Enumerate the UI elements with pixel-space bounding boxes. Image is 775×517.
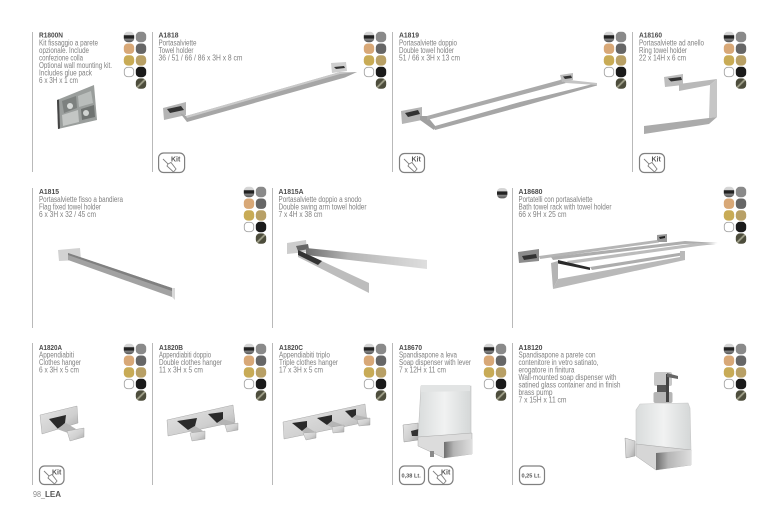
text block: A1820C description: Triple clothes hanger [279,358,338,367]
text block: A18670 description: Spandisapone a leva [399,350,457,360]
text block: A1819 description: Double towel holder [399,46,454,55]
text block: A1820A description: 6 x 3H x 5 cm [39,366,79,374]
text block: A1820C description [279,350,338,374]
text block: A1820B description: 11 x 3H x 5 cm [159,366,203,374]
badge: capacity [400,466,424,484]
product: towel holder [163,62,357,122]
text block: A18120 description: erogatore in finitura [518,366,575,374]
page number: 98_ [33,490,45,499]
text block: A1815 description: Flag fixed towel holder [39,202,101,211]
text block: A18160 description: Portasalviette ad anello [639,38,704,47]
text block: A1815A description: 7 x 4H x 38 cm [278,210,323,219]
colour swatches [724,187,746,244]
text block: A1818 description [158,38,243,62]
text block: A1819 description [399,38,460,62]
colour swatches [724,344,746,401]
colour swatches [364,32,386,89]
product: soap dispenser with pump [625,372,691,470]
panel: A1815A [272,187,507,328]
text block: A18670 description [399,350,471,374]
text block: R1800N description: Includes glue pack [39,68,93,77]
text block: A1815 description: Portasalviette fisso a bandiera [39,195,123,204]
panel: A1820A [32,343,146,485]
text block: A18680 description: 66 x 9H x 25 cm [518,210,567,219]
text block: A18160 description: 22 x 14H x 6 cm [639,53,686,62]
text block: A18680 description: Bath towel rack with towel holder [518,202,612,211]
text block: A1815A description: Portasalviette doppio a snodo [278,195,362,204]
product: triple clothes hanger [283,404,370,440]
icon: kit badge [40,466,64,484]
product: flag towel holder [58,248,175,300]
text block: A1820C description: 17 x 3H x 5 cm [279,366,323,374]
icon: kit badge [159,153,185,172]
heading: A18120: A18120 [518,343,542,352]
text block: A18120 description: Spandisapone a parete con [518,350,596,360]
text block: A18120 description: Wall-mounted soap dispenser with [518,373,616,382]
page number [33,490,61,499]
product: soap dispenser with lever [403,385,472,458]
text block: A18120 description [518,350,620,404]
heading: A1820C: A1820C [279,343,303,352]
text block: A18680 description: Portatelli con portasalviette [518,195,593,204]
text block: A1820A description: Appendiabiti [39,350,74,360]
badge: capacity: 0,25 Lt. [522,474,541,480]
panel: A1818 [152,30,386,172]
panel: A1815 [32,187,266,328]
colour swatches [724,32,746,89]
panel: A18670 [392,343,506,485]
text block: R1800N description: 6 x 3H x 1 cm [39,76,78,85]
text block: A18160 description [639,38,704,62]
product: towel rack [518,234,718,289]
text block: A18120 description: contenitore in vetro satinato, [518,358,598,367]
text block: A1815 description [39,195,123,219]
text block: A1815A description [278,195,367,219]
product: clothes hanger [40,406,84,441]
heading: A1820B: A1820B [159,343,183,352]
text block: R1800N description: confezione colla [39,53,83,62]
colour swatches [484,344,506,401]
text block: A1815A description: Double swing arm towel holder [278,202,367,211]
text block: A18120 description: satined glass container and in finish [518,380,620,390]
colour swatches [604,32,626,89]
page number: LEA [45,490,61,499]
icon: kit badge: Kit [171,156,181,164]
panel: A18160 [632,30,746,172]
text block: A18670 description: Soap dispenser with lever [399,358,471,367]
text block: A1819 description: Portasalviette doppio [399,38,457,47]
icon: kit badge: Kit [412,156,422,164]
panel: A1820B [152,343,266,485]
text block: R1800N description: Kit fissaggio a parete [39,38,98,47]
icon: kit badge: Kit [52,470,62,476]
badge: capacity [520,466,544,484]
heading: A1815A: A1815A [278,187,304,196]
colour swatches [244,187,266,244]
product: ring towel holder [644,74,717,134]
icon: kit badge [400,154,424,172]
text block: A18120 description: 7 x 15H x 11 cm [518,396,567,404]
heading: A1815: A1815 [39,187,60,196]
text block: A1815 description: 6 x 3H x 32 / 45 cm [39,210,96,219]
badge: capacity: 0,38 Lt. [402,474,421,480]
colour swatches [244,344,266,401]
icon: kit badge [640,154,664,172]
text block: A18680 description [518,195,612,219]
product: double towel holder [401,73,597,130]
text block: A18120 description: brass pump [518,388,553,397]
icon: kit badge: Kit [441,470,451,476]
text block: R1800N description: opzionale. Include [39,46,89,55]
text block: A1820B description [159,350,222,374]
text block: A1818 description: Towel holder [158,46,194,55]
text block: A1820B description: Double clothes hanger [159,358,222,367]
text block: R1800N description: Optional wall mounting kit. [39,61,112,70]
icon: kit badge: Kit [652,156,662,164]
heading: A1820A: A1820A [39,343,62,352]
text block: R1800N description [39,38,112,85]
colour swatch [497,188,507,198]
icon: kit badge [428,466,453,484]
heading: A1819: A1819 [399,30,419,40]
product: double clothes hanger [167,405,238,441]
heading: A18680: A18680 [518,187,542,196]
panel: A18120 [512,343,746,485]
product: swing arm towel holder [287,240,427,293]
panel: A18680 [512,187,746,328]
text block: A1820C description: Appendiabiti triplo [279,350,330,360]
colour swatches [124,32,146,89]
heading: A18160: A18160 [639,30,662,40]
text block: A1818 description: Portasalviette [158,38,197,47]
text block: A1819 description: 51 / 66 x 3H x 13 cm [399,53,460,62]
text block: A1820B description: Appendiabiti doppio [159,350,211,360]
panel: R1800N [32,30,146,172]
heading: R1800N: R1800N [39,30,63,40]
text block: A18160 description: Ring towel holder [639,46,687,55]
text block: A1820A description [39,350,81,374]
colour swatches [364,344,386,401]
heading: A1818: A1818 [158,30,178,40]
panel: A1820C [272,343,386,485]
text block: A18670 description: 7 x 12H x 11 cm [399,366,446,374]
heading: A18670: A18670 [399,343,422,352]
product: mounting kit [57,85,97,129]
panel: A1819 [392,30,626,172]
text block: A1818 description: 36 / 51 / 66 / 86 x 3H x 8 cm [158,53,243,62]
text block: A1820A description: Clothes hanger [39,358,81,367]
colour swatches [124,344,146,401]
